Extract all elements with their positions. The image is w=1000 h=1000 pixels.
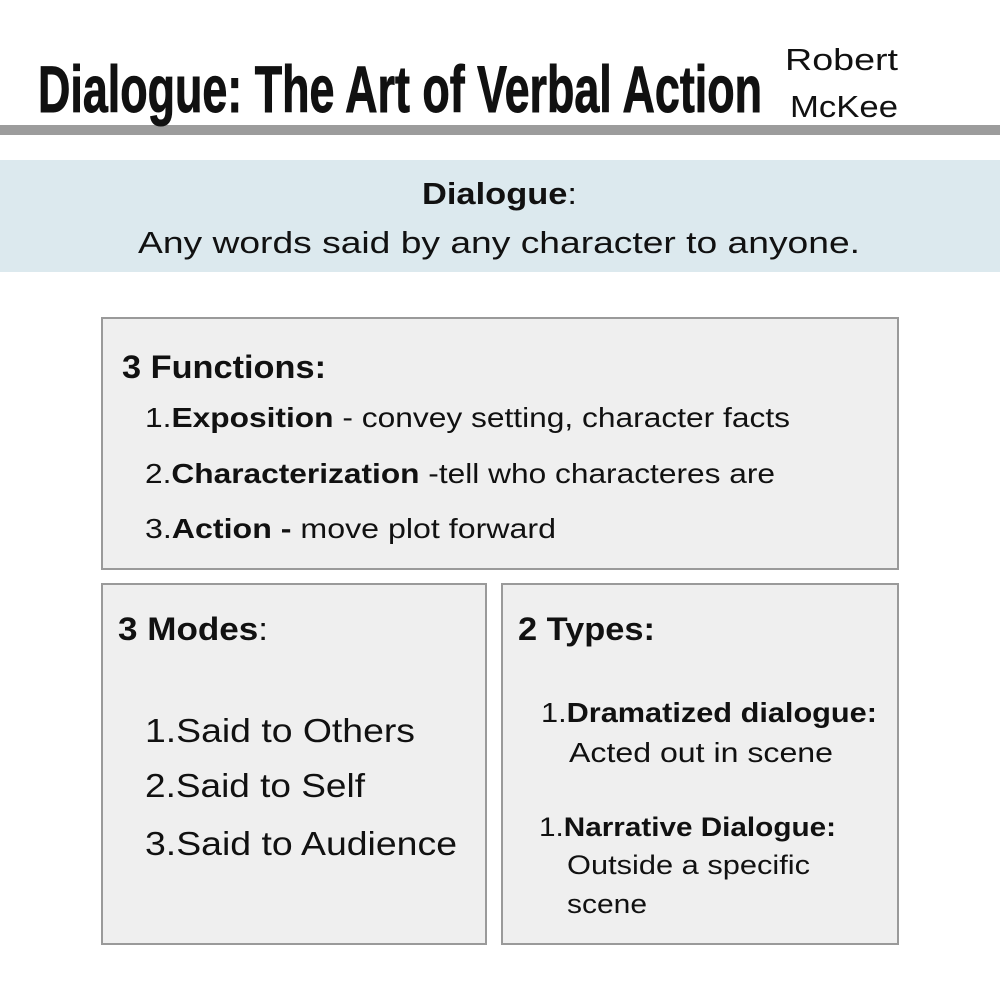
modes heading: 3 Modes : xyxy=(118,611,268,647)
types heading: 2 Types: xyxy=(518,611,655,647)
gray rule xyxy=(0,125,1000,135)
type 2: 1.Narrative Dialogue: xyxy=(539,812,836,842)
definition text: Any words said by any character to anyone. xyxy=(138,225,860,260)
modes list: 2.Said to Self xyxy=(145,767,366,804)
type 2 xyxy=(539,812,836,919)
type 2: scene xyxy=(567,889,647,919)
type 1: Acted out in scene xyxy=(569,737,833,768)
modes list: 1.Said to Others xyxy=(145,712,415,749)
panel: functions xyxy=(101,317,899,570)
functions list: 3.Action - move plot forward xyxy=(145,513,556,544)
definition heading: Dialogue : xyxy=(422,176,577,211)
modes list xyxy=(145,712,457,862)
functions heading: 3 Functions: xyxy=(122,349,326,385)
author: McKee xyxy=(790,89,898,124)
definition band xyxy=(0,160,1000,272)
functions list: 1.Exposition - convey setting, character facts xyxy=(145,402,790,433)
panel: modes xyxy=(101,583,487,945)
modes list: 3.Said to Audience xyxy=(145,825,457,862)
type 1: 1.Dramatized dialogue: xyxy=(541,697,877,728)
author: Robert xyxy=(785,42,898,77)
functions list: 2.Characterization -tell who characteres are xyxy=(145,458,775,489)
type 1 xyxy=(541,697,877,768)
type 2: Outside a specific xyxy=(567,850,810,880)
author xyxy=(785,42,898,124)
panel: types xyxy=(501,583,899,945)
functions list xyxy=(145,402,790,544)
